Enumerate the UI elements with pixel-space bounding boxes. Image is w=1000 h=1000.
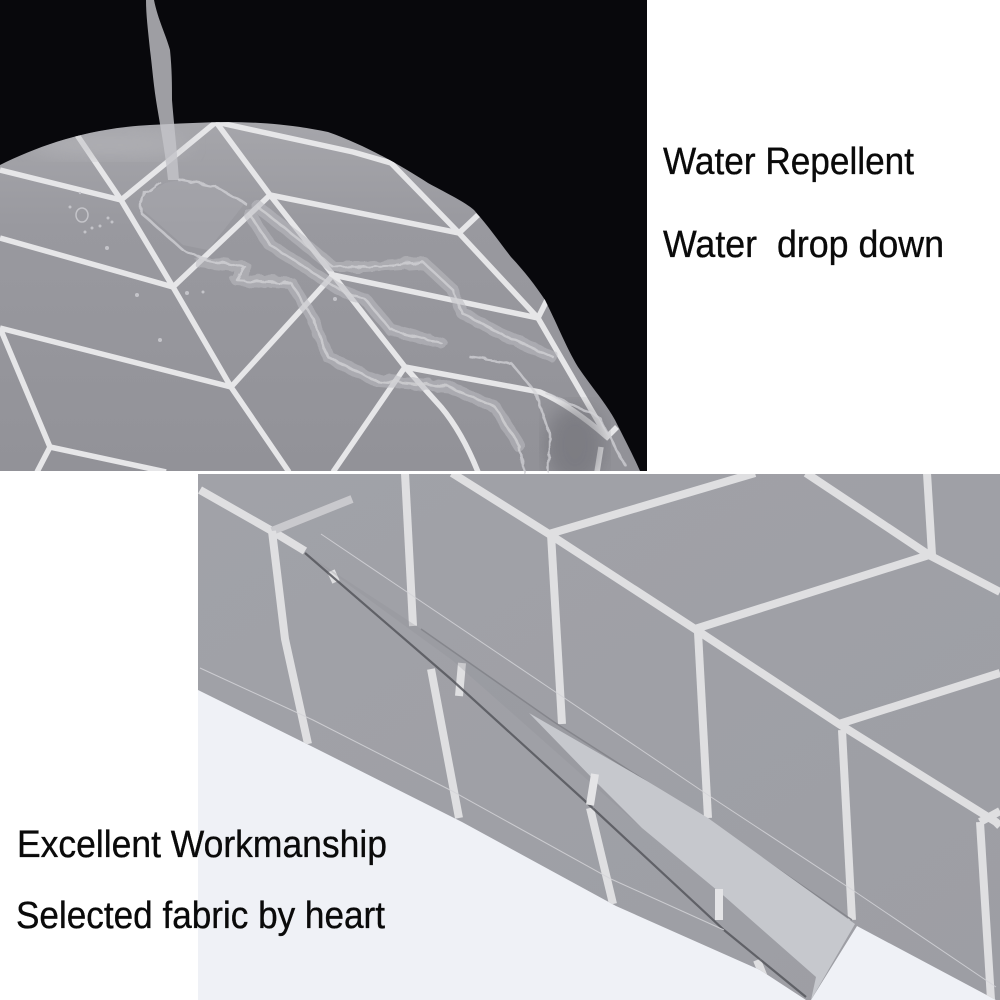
water puddle and rivulets <box>141 180 625 472</box>
caption: Excellent Workmanship: Excellent Workmanship <box>17 824 387 866</box>
hem stitching <box>200 534 996 987</box>
panel: workmanship photo <box>198 473 1000 1000</box>
geometric white line pattern <box>0 122 617 472</box>
water droplets <box>68 192 337 342</box>
geometric white line pattern <box>200 473 1000 1000</box>
fold band shade <box>305 553 852 977</box>
caption: Selected fabric by heart: Selected fabric by heart <box>16 895 385 937</box>
water stream <box>146 0 179 180</box>
panel: water repellent photo <box>0 0 647 485</box>
fold shadow edge <box>305 553 806 997</box>
light underside of hem <box>529 713 855 1000</box>
upper hem edge <box>421 629 852 920</box>
soft shading on fabric <box>30 131 605 485</box>
curtain fabric <box>198 474 1000 1000</box>
caption: Water Repellent: Water Repellent <box>663 141 914 183</box>
hem white pieces on underside <box>590 774 719 920</box>
caption: Water drop down: Water drop down <box>663 224 944 266</box>
curtain fabric dome <box>0 122 640 471</box>
water puddle fill <box>141 180 245 250</box>
